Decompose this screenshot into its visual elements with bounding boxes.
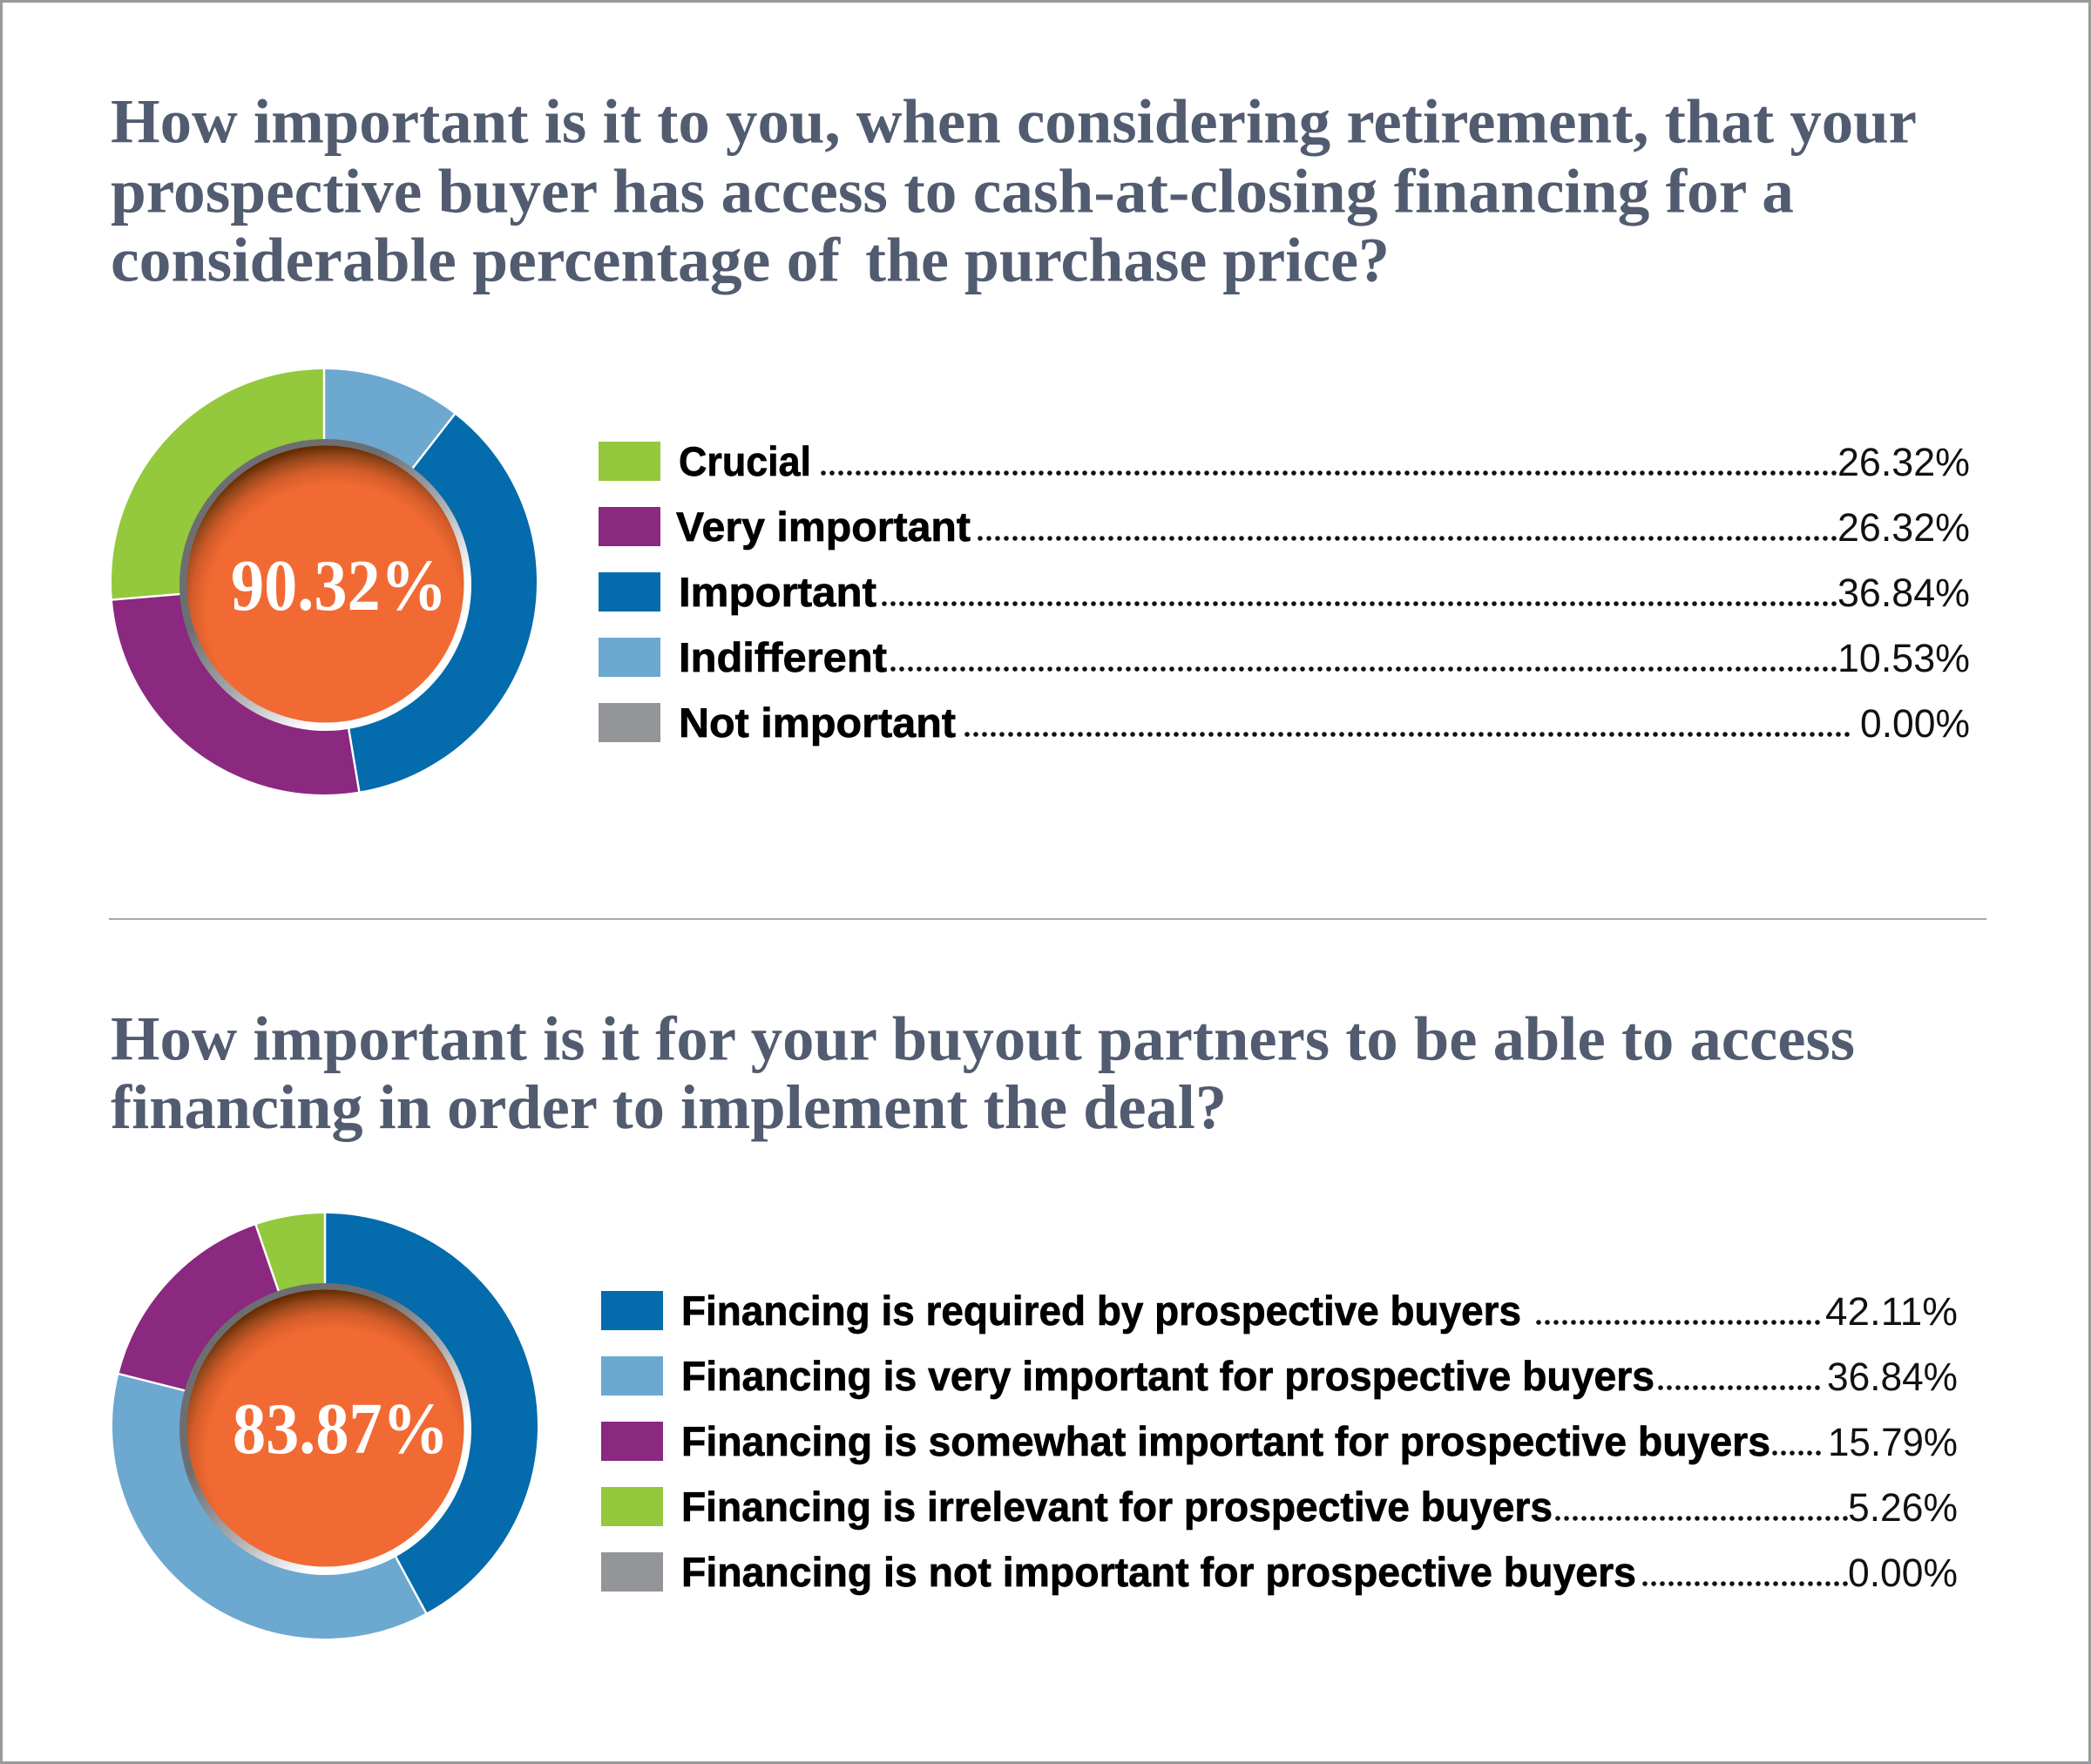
legend row: Very important: Very important [676,504,971,550]
legend row: Important: 36.84% [1837,571,1970,615]
legend row: Not important: Not important [679,700,956,746]
legend row: Indifferent: 10.53% [1837,636,1970,680]
legend row: Crucial: 26.32% [1837,440,1970,484]
legend row: Not important [599,700,1970,746]
legend row: required: 42.11% [1825,1289,1958,1334]
heading: question one [111,87,1917,294]
heading: question two: How important is it for your buyout partners to be able to access [111,1004,1855,1073]
center value: 83.87%: 83.87% [233,1389,449,1470]
legend: question two [601,1288,1958,1595]
donut chart: question one [111,368,495,794]
heading: question two [111,1004,1855,1142]
legend row: not important: Financing is not important for prospective buyers [681,1549,1636,1595]
legend row: somewhat important: 15.79% [1828,1420,1958,1464]
legend row: Very important [599,504,1970,550]
heading: question one: prospective buyer has access to cash-at-closing financing for a [111,157,1794,226]
legend row: required: Financing is required by prospective buyers [681,1288,1521,1334]
legend row: not important: 0.00% [1848,1551,1958,1595]
legend row: Indifferent: Indifferent [679,634,887,680]
legend row: Important [599,569,1970,615]
heading: question one: the purchase price? [865,225,1390,294]
legend: question one [599,438,1970,746]
legend row: Crucial [599,438,1970,484]
legend row: Not important: 0.00% [1860,701,1970,746]
legend row: irrelevant: Financing is irrelevant for prospective buyers [681,1484,1553,1530]
legend row: very important: 36.84% [1827,1355,1958,1399]
legend row: very important: Financing is very important for prospective buyers [681,1353,1655,1399]
legend row: irrelevant [601,1484,1958,1530]
legend row: Important: Important [679,569,876,615]
legend row: Very important: 26.32% [1837,505,1970,550]
heading: question one: considerable percentage of [111,225,841,294]
legend row: required [601,1288,1958,1334]
legend row: somewhat important: Financing is somewhat important for prospective buyers [681,1418,1770,1464]
heading: question two: financing in order to implement the deal? [111,1072,1227,1142]
center value: 90.32%: 90.32% [231,545,447,626]
legend row: Indifferent [599,634,1970,680]
donut chart: question two [117,1212,496,1614]
heading: question one: How important is it to you, when considering retirement, that your [111,87,1917,157]
legend row: irrelevant: 5.26% [1848,1485,1958,1530]
legend row: Crucial: Crucial [679,438,811,484]
